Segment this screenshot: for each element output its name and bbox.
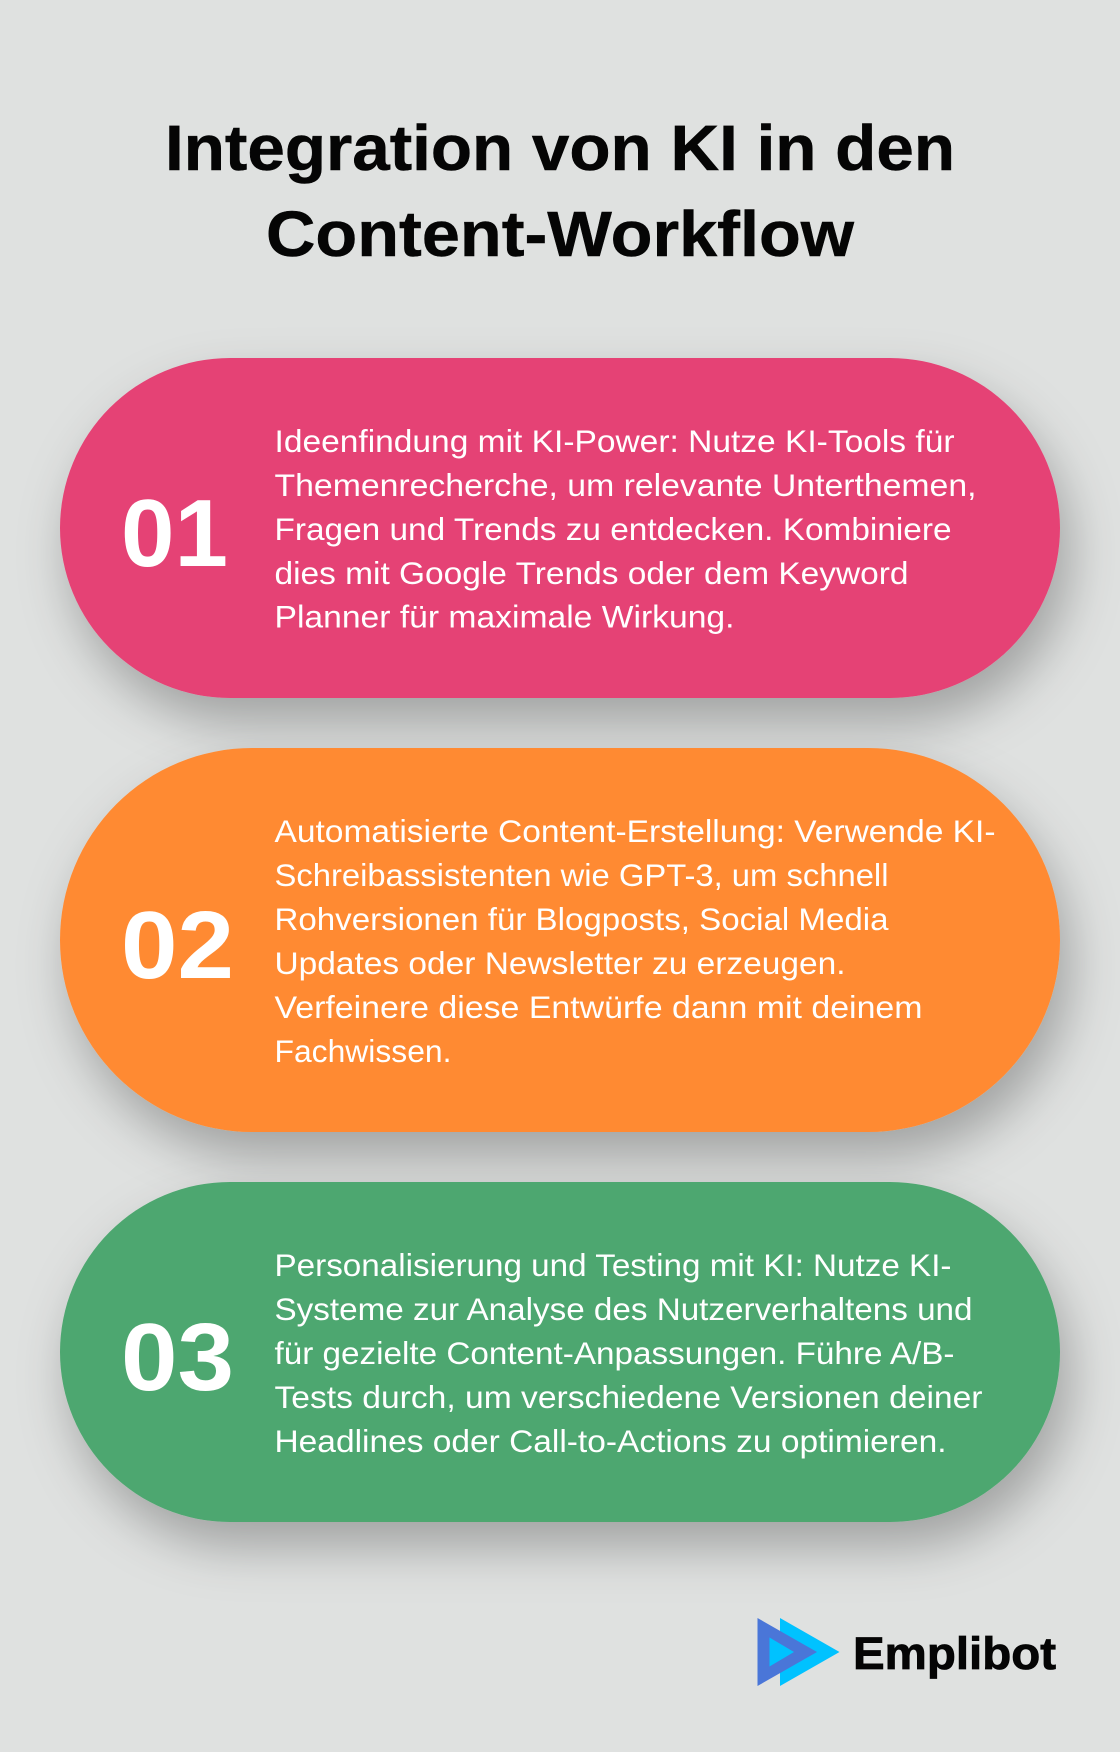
panel: step 01 bbox=[60, 358, 1060, 698]
step 01 text: Themenrecherche, um relevante Unterthemen, bbox=[274, 467, 976, 503]
step 02 text: Verfeinere diese Entwürfe dann mit deinem bbox=[274, 989, 922, 1025]
step 02 text: Fachwissen. bbox=[274, 1033, 452, 1069]
step 03 text: Tests durch, um verschiedene Versionen deiner bbox=[274, 1379, 982, 1415]
step 03 text: Personalisierung und Testing mit KI: Nutze KI- bbox=[274, 1247, 952, 1283]
panel: step 03 bbox=[60, 1182, 1060, 1522]
number 01: 01 bbox=[121, 480, 228, 587]
logo wordmark: Emplibot bbox=[853, 1628, 1056, 1679]
step 03 text bbox=[274, 1247, 982, 1459]
logo: Emplibot bbox=[758, 1618, 1056, 1686]
step 03 text: für gezielte Content-Anpassungen. Führe A/B- bbox=[274, 1335, 954, 1371]
number 02: 02 bbox=[121, 892, 234, 999]
step 03 text: Headlines oder Call-to-Actions zu optimieren. bbox=[274, 1423, 946, 1459]
step 01 text: Fragen und Trends zu entdecken. Kombiniere bbox=[274, 511, 952, 547]
pink pill background bbox=[60, 358, 1060, 698]
title: Content-Workflow bbox=[266, 198, 854, 270]
title: Integration von KI in den bbox=[165, 112, 955, 184]
number 03: 03 bbox=[121, 1304, 234, 1411]
step 01 text: Ideenfindung mit KI-Power: Nutze KI-Tools für bbox=[274, 423, 954, 459]
icon: play triangles bbox=[758, 1618, 840, 1686]
step 01 text: dies mit Google Trends oder dem Keyword bbox=[274, 555, 909, 591]
step 01 text: Planner für maximale Wirkung. bbox=[274, 598, 734, 634]
title bbox=[165, 112, 955, 270]
panel: step 02 bbox=[60, 748, 1060, 1132]
orange pill background bbox=[60, 748, 1060, 1132]
step 02 text bbox=[274, 813, 996, 1069]
green pill background bbox=[60, 1182, 1060, 1522]
step 01 text bbox=[274, 423, 976, 634]
step 02 text: Schreibassistenten wie GPT-3, um schnell bbox=[274, 857, 888, 893]
step 02 text: Updates oder Newsletter zu erzeugen. bbox=[274, 945, 846, 981]
step 03 text: Systeme zur Analyse des Nutzerverhaltens und bbox=[274, 1291, 972, 1327]
step 02 text: Automatisierte Content-Erstellung: Verwende KI- bbox=[274, 813, 996, 849]
step 02 text: Rohversionen für Blogposts, Social Media bbox=[274, 901, 889, 937]
